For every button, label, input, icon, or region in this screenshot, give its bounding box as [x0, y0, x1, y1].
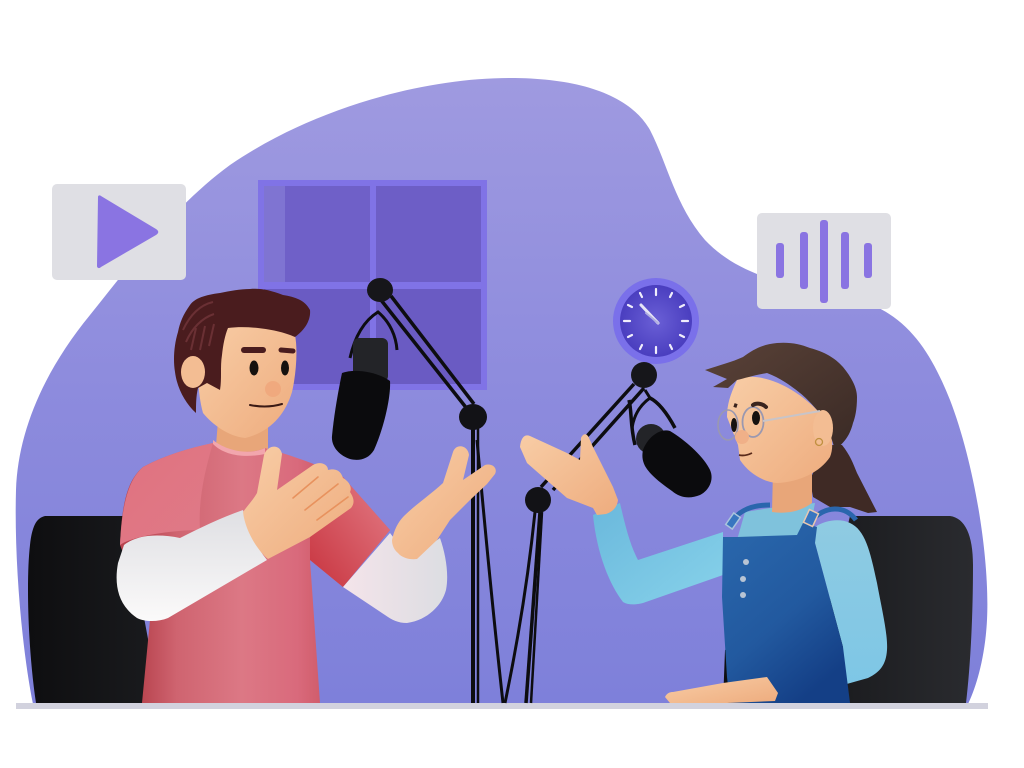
right mic stand [505, 362, 675, 703]
woman face details [718, 404, 822, 455]
overall buttons [740, 559, 749, 598]
man white arm left [117, 510, 267, 621]
woman right sleeve [768, 520, 887, 700]
woman raised hand [520, 434, 618, 515]
man character [117, 289, 496, 703]
man collar [213, 440, 265, 456]
man hand right [392, 446, 496, 559]
man hair [174, 289, 310, 413]
woman overalls [722, 523, 850, 703]
left microphone [332, 338, 390, 460]
man head [197, 325, 296, 438]
man hair ridges [183, 302, 214, 350]
woman ponytail [810, 445, 877, 513]
man torso [120, 443, 390, 703]
woman head [727, 377, 832, 483]
man shoulder [120, 443, 213, 545]
window [258, 180, 487, 390]
man forearm sleeve [310, 477, 390, 587]
man white arm right [343, 533, 447, 623]
play card icon [52, 184, 186, 280]
background blob [16, 78, 987, 704]
woman shirt neck [737, 503, 815, 540]
woman neck [772, 470, 812, 513]
wall clock [613, 278, 699, 364]
table edge [16, 703, 988, 709]
man hand centre [243, 447, 354, 559]
right microphone [636, 424, 712, 497]
woman raised sleeve [593, 503, 723, 604]
audio wave card icon [757, 213, 891, 309]
man neck [216, 420, 268, 455]
woman character [520, 343, 887, 703]
right chair [723, 516, 973, 703]
left chair [28, 516, 160, 703]
woman hair [705, 343, 857, 450]
man ear [181, 356, 205, 388]
left mic stand [350, 278, 503, 703]
woman table hand [665, 677, 778, 703]
woman straps [726, 505, 856, 529]
man face details [244, 350, 293, 406]
woman ear [813, 410, 833, 446]
